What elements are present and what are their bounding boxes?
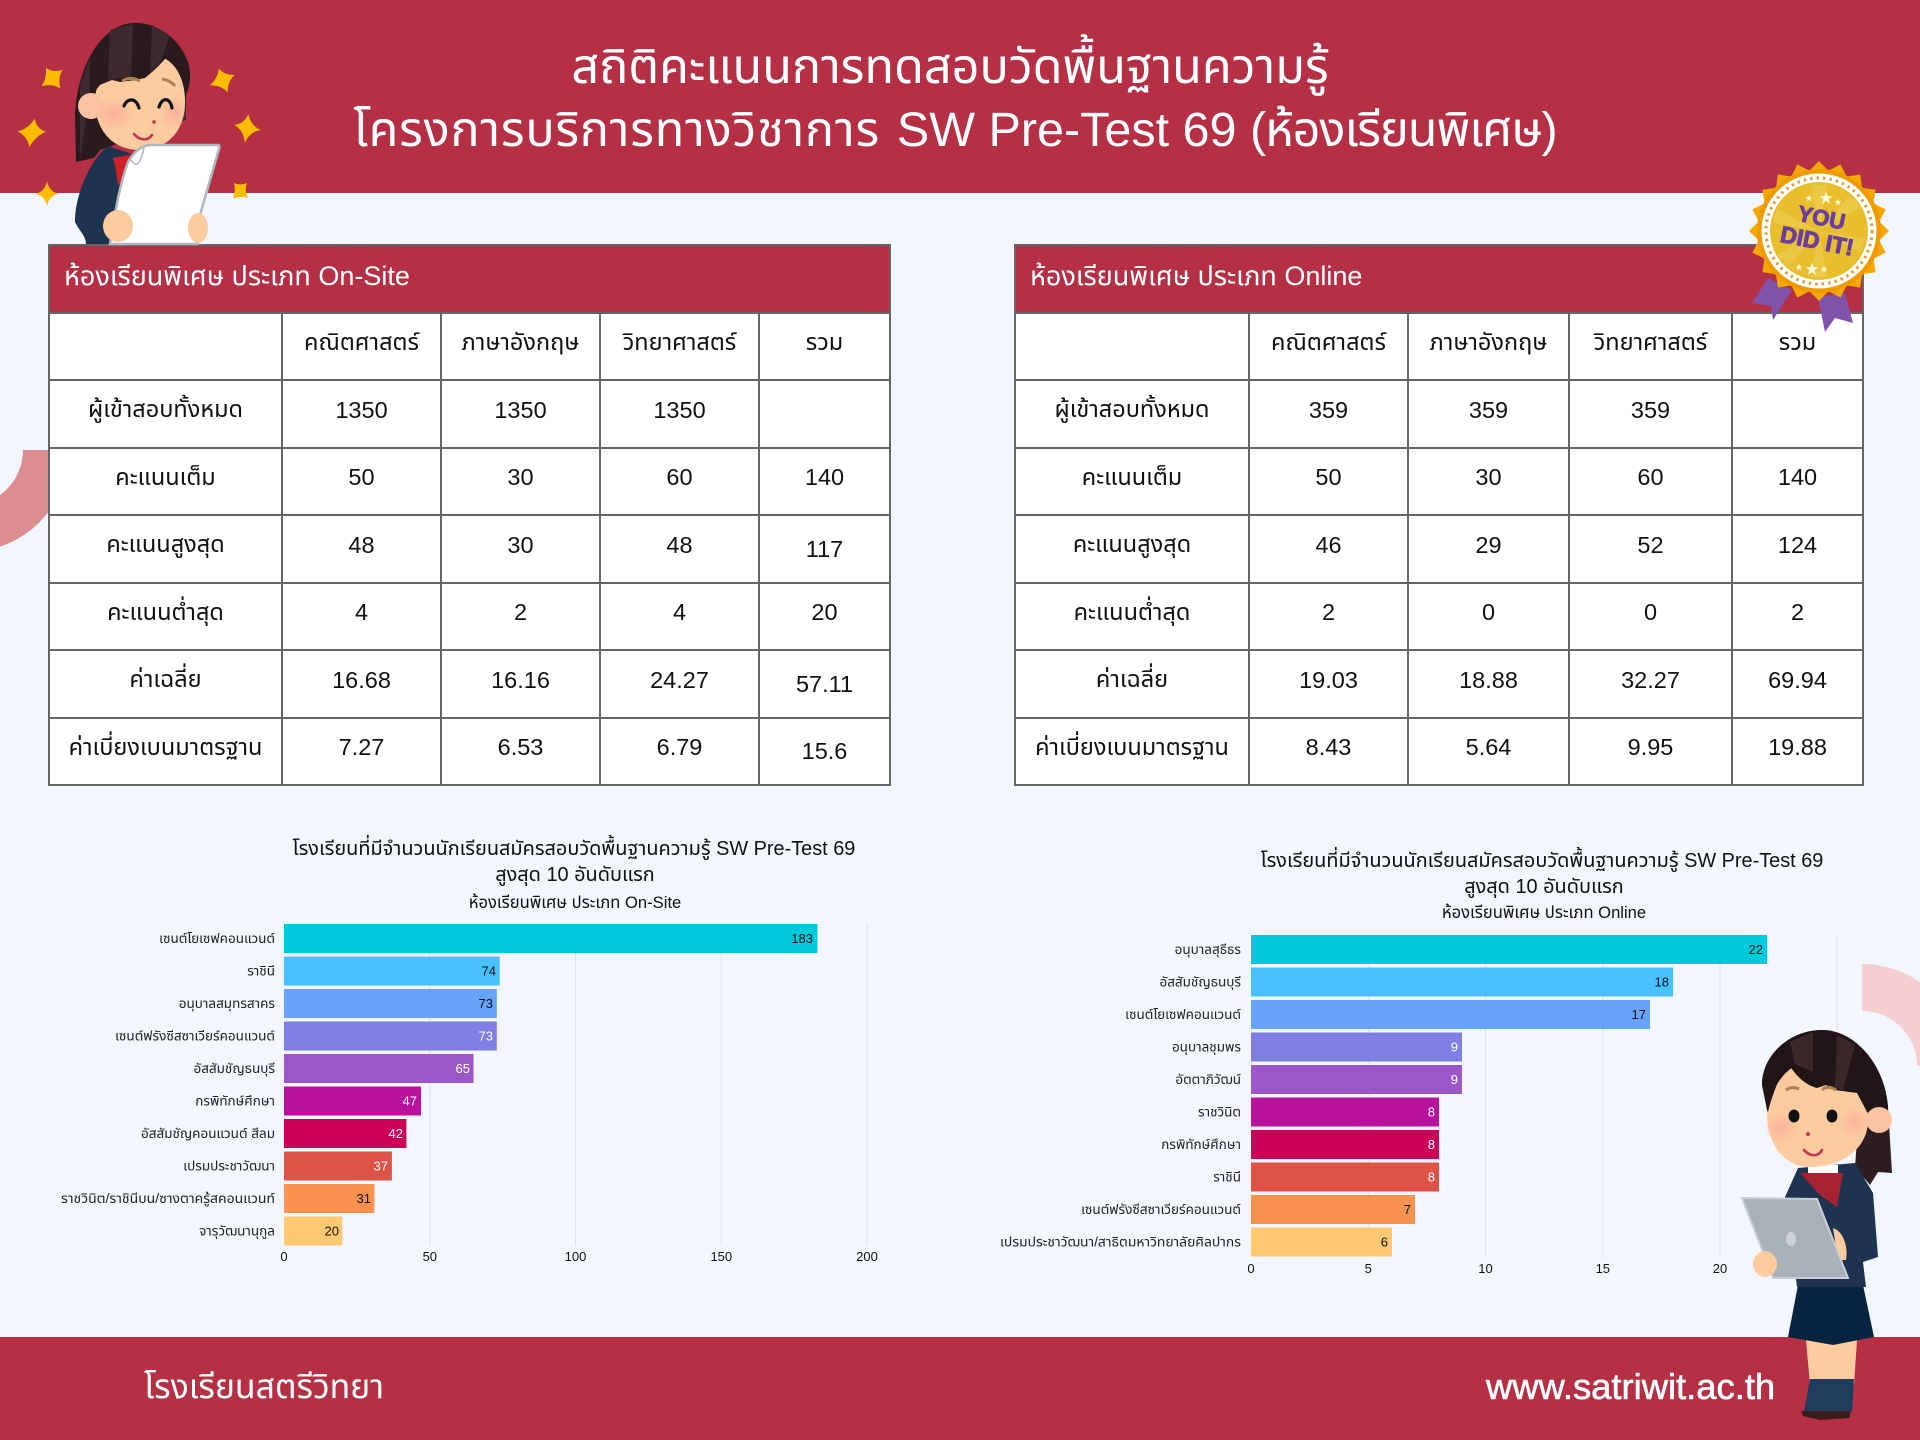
icon: you did it badge: YOU (1796, 201, 1847, 235)
icon: you did it badge: ★ (1805, 261, 1819, 277)
bar chart: on-site schools (61, 834, 878, 1264)
bar chart: on-site schools: 42 (389, 1126, 403, 1141)
panel: online statistics table: 52 (1637, 532, 1664, 558)
panel: online statistics table: วิทยาศาสตร์ (1594, 329, 1707, 355)
panel: on-site statistics table: วิทยาศาสตร์ (623, 329, 736, 355)
footer website: www.satriwit.ac.th (1486, 1366, 1775, 1407)
title: โครงการบริการทางวิชาการ SW Pre-Test 69 (ห้องเรียนพิเศษ) (353, 103, 1557, 157)
panel: online statistics table: คะแนนเต็ม (1082, 464, 1182, 490)
panel: on-site statistics table: 117 (806, 536, 843, 562)
bar chart: on-site schools: 150 (710, 1249, 732, 1264)
panel: on-site statistics table: 1350 (335, 397, 388, 423)
panel: online statistics table: 8.43 (1306, 734, 1351, 760)
bar chart: online schools: โรงเรียนที่มีจำนวนนักเรียนสมัครสอบวัดพื้นฐานความรู้ SW Pre-Test 69 (1261, 846, 1823, 873)
panel: online statistics table: 50 (1315, 464, 1342, 490)
bar chart: online schools: สูงสุด 10 อันดับแรก (1464, 876, 1624, 899)
bar chart: online schools: 6 (1381, 1234, 1388, 1250)
panel: online statistics table: ค่าเบี่ยงเบนมาตรฐาน (1035, 734, 1229, 760)
panel: on-site statistics table: 30 (507, 532, 534, 558)
panel: online statistics table: คะแนนต่ำสุด (1074, 599, 1190, 625)
panel: on-site statistics table: 57.11 (796, 671, 853, 697)
panel: on-site statistics table: 16.16 (491, 667, 550, 693)
panel: online statistics table: ผู้เข้าสอบทั้งหมด (1054, 396, 1210, 422)
bar chart: on-site schools: โรงเรียนที่มีจำนวนนักเรียนสมัครสอบวัดพื้นฐานความรู้ SW Pre-Test 69 (293, 834, 855, 861)
panel: online statistics table: 32.27 (1621, 667, 1680, 693)
icon: you did it badge: ★ (1805, 194, 1813, 203)
bar chart: online schools: 9 (1451, 1040, 1458, 1054)
bar chart: on-site schools: 73 (479, 1028, 493, 1044)
bar chart: online schools: 20 (1713, 1261, 1727, 1276)
panel: on-site statistics table: 4 (673, 599, 686, 625)
bar chart: on-site schools: ห้องเรียนพิเศษ ประเภท On-Site (469, 893, 681, 912)
title (353, 34, 1557, 157)
bar chart: online schools: อัสสัมชัญธนบุรี (1159, 974, 1241, 990)
bar chart: online schools: ห้องเรียนพิเศษ ประเภท Online (1442, 903, 1646, 922)
panel: online statistics table: ค่าเฉลี่ย (1096, 666, 1168, 692)
bar chart: online schools: ราชวินิต (1198, 1104, 1241, 1120)
title: สถิติคะแนนการทดสอบวัดพื้นฐานความรู้ (571, 40, 1329, 94)
bar chart: online schools: 18 (1655, 974, 1669, 990)
bar chart: online schools: 8 (1428, 1104, 1435, 1120)
bar chart: online schools: 5 (1365, 1261, 1372, 1276)
panel: online statistics table: 2 (1322, 599, 1335, 625)
bar chart: on-site schools: 31 (357, 1191, 371, 1206)
bar chart: on-site schools: เปรมประชาวัฒนา (183, 1158, 275, 1174)
panel: online statistics table: 18.88 (1459, 667, 1518, 693)
bar chart: on-site schools: จารุวัฒนานุกูล (199, 1224, 275, 1240)
panel: on-site statistics table: 2 (514, 599, 527, 625)
panel: on-site statistics table: 30 (507, 464, 534, 490)
panel: online statistics table: 5.64 (1466, 734, 1511, 760)
bar chart: online schools: 17 (1632, 1007, 1646, 1022)
bar chart: on-site schools: 183 (791, 931, 813, 946)
panel: on-site statistics table: รวม (806, 329, 843, 355)
panel: online statistics table: 0 (1482, 599, 1495, 625)
panel: online statistics table: 2 (1791, 599, 1804, 625)
bar chart: online schools: 8 (1428, 1170, 1435, 1184)
bar chart: on-site schools: 200 (856, 1249, 878, 1264)
bar chart: on-site schools: 0 (280, 1249, 288, 1264)
bar chart: on-site schools: 65 (456, 1061, 470, 1076)
icon: girl reading paper with stars (18, 23, 261, 246)
panel: on-site statistics table: 50 (348, 464, 375, 490)
panel: on-site statistics table: คณิตศาสตร์ (304, 329, 419, 355)
bar chart: on-site schools: 100 (565, 1249, 586, 1264)
bar chart: online schools: 10 (1478, 1261, 1493, 1276)
panel: on-site statistics table: 15.6 (802, 738, 847, 764)
icon: you did it badge: ★ (1820, 265, 1828, 274)
bar chart: online schools: อนุบาลสุธีธร (1175, 942, 1241, 958)
bar chart: online schools: 15 (1596, 1261, 1610, 1276)
bar chart: on-site schools: 47 (403, 1094, 417, 1108)
panel: on-site statistics table: 16.68 (332, 667, 391, 693)
bar chart: online schools: 22 (1749, 942, 1763, 957)
panel: on-site statistics table: คะแนนต่ำสุด (107, 599, 224, 625)
panel: on-site statistics table: ภาษาอังกฤษ (462, 329, 579, 355)
panel: online statistics table: 69.94 (1768, 667, 1827, 693)
icon: you did it badge: ★ (1834, 198, 1842, 207)
bar chart: online schools (1000, 846, 1838, 1276)
panel: on-site statistics table: ค่าเบี่ยงเบนมาตรฐาน (69, 734, 262, 760)
bar chart: on-site schools: 37 (374, 1158, 388, 1174)
bar chart: online schools: อนุบาลชุมพร (1172, 1040, 1241, 1056)
bar chart: online schools: ราชินี (1213, 1170, 1241, 1184)
panel: online statistics table: 30 (1475, 464, 1502, 490)
panel: online statistics table: 29 (1475, 532, 1502, 558)
panel: online statistics table: 9.95 (1628, 734, 1673, 760)
panel: on-site statistics table: ค่าเฉลี่ย (129, 666, 202, 692)
panel: on-site statistics table: 48 (348, 532, 375, 558)
panel: online statistics table: คะแนนสูงสุด (1073, 531, 1191, 557)
bar chart: on-site schools: สูงสุด 10 อันดับแรก (495, 864, 655, 887)
panel: online statistics table: 19.88 (1768, 734, 1827, 760)
panel: online statistics table: 60 (1637, 464, 1664, 490)
bar chart: on-site schools: ราชินี (247, 964, 275, 978)
panel: on-site statistics table: 24.27 (650, 667, 709, 693)
panel: online statistics table: 0 (1644, 599, 1657, 625)
bar chart: on-site schools: อัสสัมชัญธนบุรี (193, 1061, 275, 1077)
bar chart: on-site schools: 73 (479, 996, 493, 1011)
bar chart: on-site schools: ราชวินิต/ราชินีบน/ซางตาครู้สคอนแวนท์ (61, 1191, 275, 1207)
bar chart: online schools: อัตตาภิวัฒน์ (1175, 1072, 1241, 1087)
panel: on-site statistics table: 1350 (494, 397, 547, 423)
panel: online statistics table: ห้องเรียนพิเศษ ประเภท Online (1030, 261, 1362, 291)
bar chart: on-site schools: เซนต์โยเซฟคอนแวนต์ (159, 931, 275, 946)
panel: on-site statistics table: 60 (666, 464, 693, 490)
panel: on-site statistics table: 7.27 (339, 734, 384, 760)
panel: on-site statistics table: 48 (666, 532, 693, 558)
panel: on-site statistics table: ผู้เข้าสอบทั้งหมด (88, 396, 243, 422)
bar chart: online schools: 8 (1428, 1137, 1435, 1152)
bar chart: on-site schools: 74 (482, 964, 496, 978)
bar chart: online schools: เซนต์ฟรังซีสซาเวียร์คอนแวนต์ (1081, 1202, 1241, 1217)
panel: on-site statistics table: 6.53 (498, 734, 543, 760)
panel: on-site statistics table: 6.79 (657, 734, 702, 760)
panel: online statistics table: รวม (1779, 329, 1816, 355)
panel: online statistics table: 359 (1309, 397, 1348, 423)
bar chart: on-site schools: อัสสัมชัญคอนแวนต์ สีลม (141, 1126, 275, 1141)
panel: online statistics table: 359 (1469, 397, 1508, 423)
panel: online statistics table: 46 (1315, 532, 1342, 558)
icon: you did it badge (1749, 161, 1889, 332)
panel: on-site statistics table: คะแนนเต็ม (115, 464, 216, 490)
bar chart: online schools: เซนต์โยเซฟคอนแวนต์ (1125, 1007, 1241, 1022)
bar chart: on-site schools: อนุบาลสมุทรสาคร (179, 996, 275, 1012)
footer band (0, 1337, 1920, 1440)
panel: online statistics table: คณิตศาสตร์ (1271, 329, 1386, 355)
icon: you did it badge: ★ (1795, 263, 1803, 272)
panel: on-site statistics table: 140 (805, 464, 844, 490)
panel: on-site statistics table: คะแนนสูงสุด (106, 531, 225, 557)
header band (0, 0, 1920, 193)
bar chart: online schools: 0 (1247, 1261, 1255, 1276)
icon: girl holding tablet (1740, 1030, 1892, 1420)
panel: online statistics table: 124 (1778, 532, 1817, 558)
footer school name: โรงเรียนสตรีวิทยา (144, 1368, 384, 1406)
panel: on-site statistics table: 4 (355, 599, 368, 625)
panel: online statistics table: ภาษาอังกฤษ (1430, 329, 1547, 355)
bar chart: online schools: 7 (1404, 1202, 1411, 1217)
icon: you did it badge: ★ (1819, 190, 1833, 206)
bar chart: on-site schools: 50 (423, 1249, 437, 1264)
panel: on-site statistics table: 20 (811, 599, 838, 625)
panel: on-site statistics table (48, 244, 891, 786)
bar chart: online schools: 9 (1451, 1072, 1458, 1087)
panel: on-site statistics table: 1350 (653, 397, 706, 423)
panel: on-site statistics table: ห้องเรียนพิเศษ ประเภท On-Site (64, 261, 410, 291)
bar chart: online schools: เปรมประชาวัฒนา/สาธิตมหาวิทยาลัยศิลปากร (1000, 1234, 1241, 1250)
bar chart: online schools: กรพิทักษ์ศึกษา (1161, 1137, 1241, 1152)
panel: online statistics table: 19.03 (1299, 667, 1358, 693)
icon: you did it badge: DID IT! (1778, 221, 1856, 261)
panel: online statistics table (1014, 244, 1864, 786)
bar chart: on-site schools: 20 (325, 1224, 339, 1238)
panel: online statistics table: 359 (1631, 397, 1670, 423)
bar chart: on-site schools: เซนต์ฟรังซีสซาเวียร์คอนแวนต์ (115, 1028, 275, 1044)
panel: online statistics table: 140 (1778, 464, 1817, 490)
bar chart: on-site schools: กรพิทักษ์ศึกษา (195, 1094, 275, 1108)
